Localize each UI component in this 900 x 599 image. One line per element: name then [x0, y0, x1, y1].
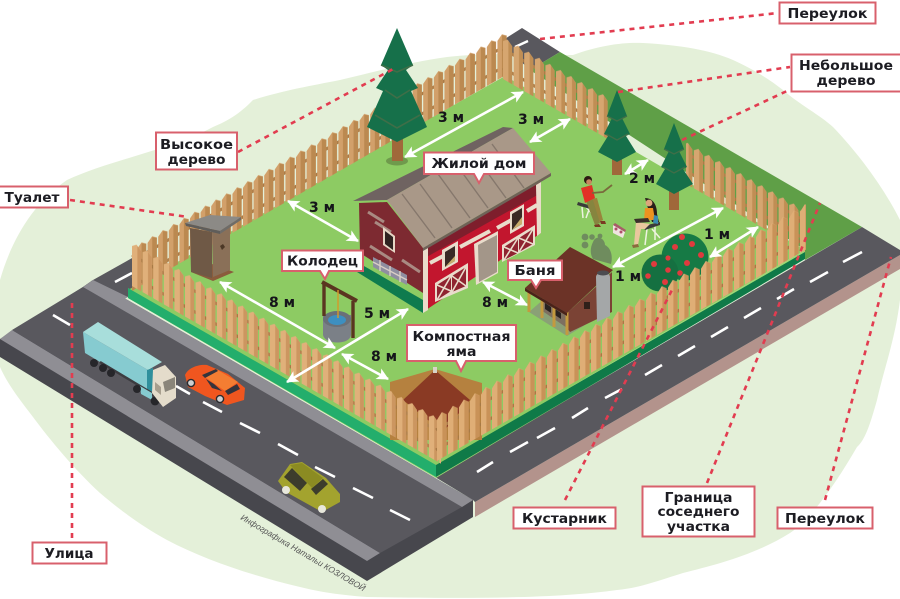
label: lane bottom: Переулок	[785, 512, 865, 527]
label: outhouse	[0, 186, 68, 208]
icon: smoke	[582, 234, 612, 264]
distance arrow: 8 m outhouse: 8 м	[269, 295, 295, 311]
label: compost pit: Компостная	[412, 330, 510, 345]
label: neighbouring plot border	[642, 486, 754, 536]
icon: woman on chair	[632, 198, 660, 248]
icon: man on chair	[577, 176, 612, 227]
icon: compost pit	[390, 367, 482, 440]
label: living house	[424, 152, 534, 183]
label: compost pit	[407, 325, 516, 371]
label: tall tree	[156, 132, 237, 170]
icon: bushes	[642, 234, 708, 292]
distance arrow: 5 m: 5 м	[364, 306, 390, 322]
label: living house: Жилой дом	[432, 157, 526, 172]
back-left fence	[132, 30, 507, 292]
label: well	[282, 250, 363, 279]
neighbouring plot	[530, 52, 862, 260]
label: neighbouring plot border: участка	[667, 520, 730, 535]
leader line: small tree 2	[682, 91, 787, 140]
distance arrow: 3 m rear right: 3 м	[518, 112, 544, 128]
label: small tree: Небольшое	[799, 59, 893, 74]
distance arrow: 1 m long: 1 м	[615, 269, 641, 285]
icon: red car	[185, 365, 245, 405]
copyright note: Инфографика Натальи КОЗЛОВОЙ	[239, 511, 369, 594]
leader line: small tree 1	[618, 67, 790, 92]
distance arrow: 3 m left of house: 3 м	[309, 200, 335, 216]
leader line: lane top	[540, 13, 778, 39]
label: bathhouse	[508, 260, 562, 288]
icon: small tree 1	[598, 90, 636, 175]
label: street	[32, 542, 106, 564]
leader line: tall tree	[238, 68, 395, 152]
icon: small tree 2	[656, 123, 693, 210]
front-right fence	[436, 203, 806, 468]
side lane right	[435, 227, 900, 517]
icon: tall tree	[367, 28, 427, 166]
icon: outhouse	[185, 215, 241, 281]
label: tall tree: Высокое	[160, 138, 233, 153]
front-left fence	[132, 240, 441, 476]
plot ground	[128, 76, 805, 478]
icon: radio	[613, 223, 626, 238]
leader line: outhouse	[70, 200, 188, 217]
distance arrow: 3 m rear left: 3 м	[438, 110, 464, 126]
icon: well	[322, 282, 357, 342]
label: lane top: Переулок	[788, 7, 868, 22]
label: lane top	[780, 2, 876, 24]
distance arrow: 3 m rear right	[518, 112, 570, 142]
leader line: street	[71, 303, 73, 542]
distance arrow: 8 m to bathhouse	[482, 282, 527, 311]
icon: living house	[353, 127, 551, 313]
leader line: lane bottom	[825, 257, 891, 500]
back-right fence	[503, 30, 805, 254]
icon: bathhouse	[525, 247, 613, 336]
label: tall tree: дерево	[168, 153, 226, 168]
label: shrub	[514, 508, 616, 528]
distance arrow: 3 m rear left	[405, 92, 523, 157]
label: street: Улица	[44, 547, 94, 562]
label: neighbouring plot border: Граница	[664, 491, 732, 506]
distance arrow: 8 m to bathhouse: 8 м	[482, 295, 508, 311]
label: small tree: дерево	[816, 74, 876, 89]
distance arrow: 5 m	[287, 306, 408, 382]
distance arrow: 1 m fence	[704, 227, 758, 257]
distance arrow: 2 m	[625, 160, 655, 187]
leader line: shrub	[565, 290, 672, 500]
distance arrow: 8 m outhouse	[220, 282, 335, 348]
distance arrow: 8 m compost	[342, 349, 397, 379]
distance arrow: 8 m compost: 8 м	[371, 349, 397, 365]
icon: olive suv	[278, 462, 340, 513]
label: lane bottom	[778, 508, 872, 528]
distance arrow: 2 m: 2 м	[629, 171, 655, 187]
label: bathhouse: Баня	[514, 264, 556, 279]
label: neighbouring plot border: соседнего	[658, 505, 740, 520]
label: small tree	[792, 54, 900, 92]
distance arrow: 3 m left of house	[288, 200, 358, 241]
label: shrub: Кустарник	[522, 512, 607, 527]
icon: truck	[83, 322, 176, 407]
label: compost pit: яма	[446, 345, 476, 360]
distance arrow: 1 m long	[613, 208, 723, 285]
distance arrow: 1 m fence: 1 м	[704, 227, 730, 243]
main street	[0, 280, 473, 581]
leader line: border	[707, 203, 820, 483]
label: outhouse: Туалет	[4, 191, 60, 206]
label: well: Колодец	[287, 254, 358, 270]
back lane corners	[83, 28, 560, 304]
